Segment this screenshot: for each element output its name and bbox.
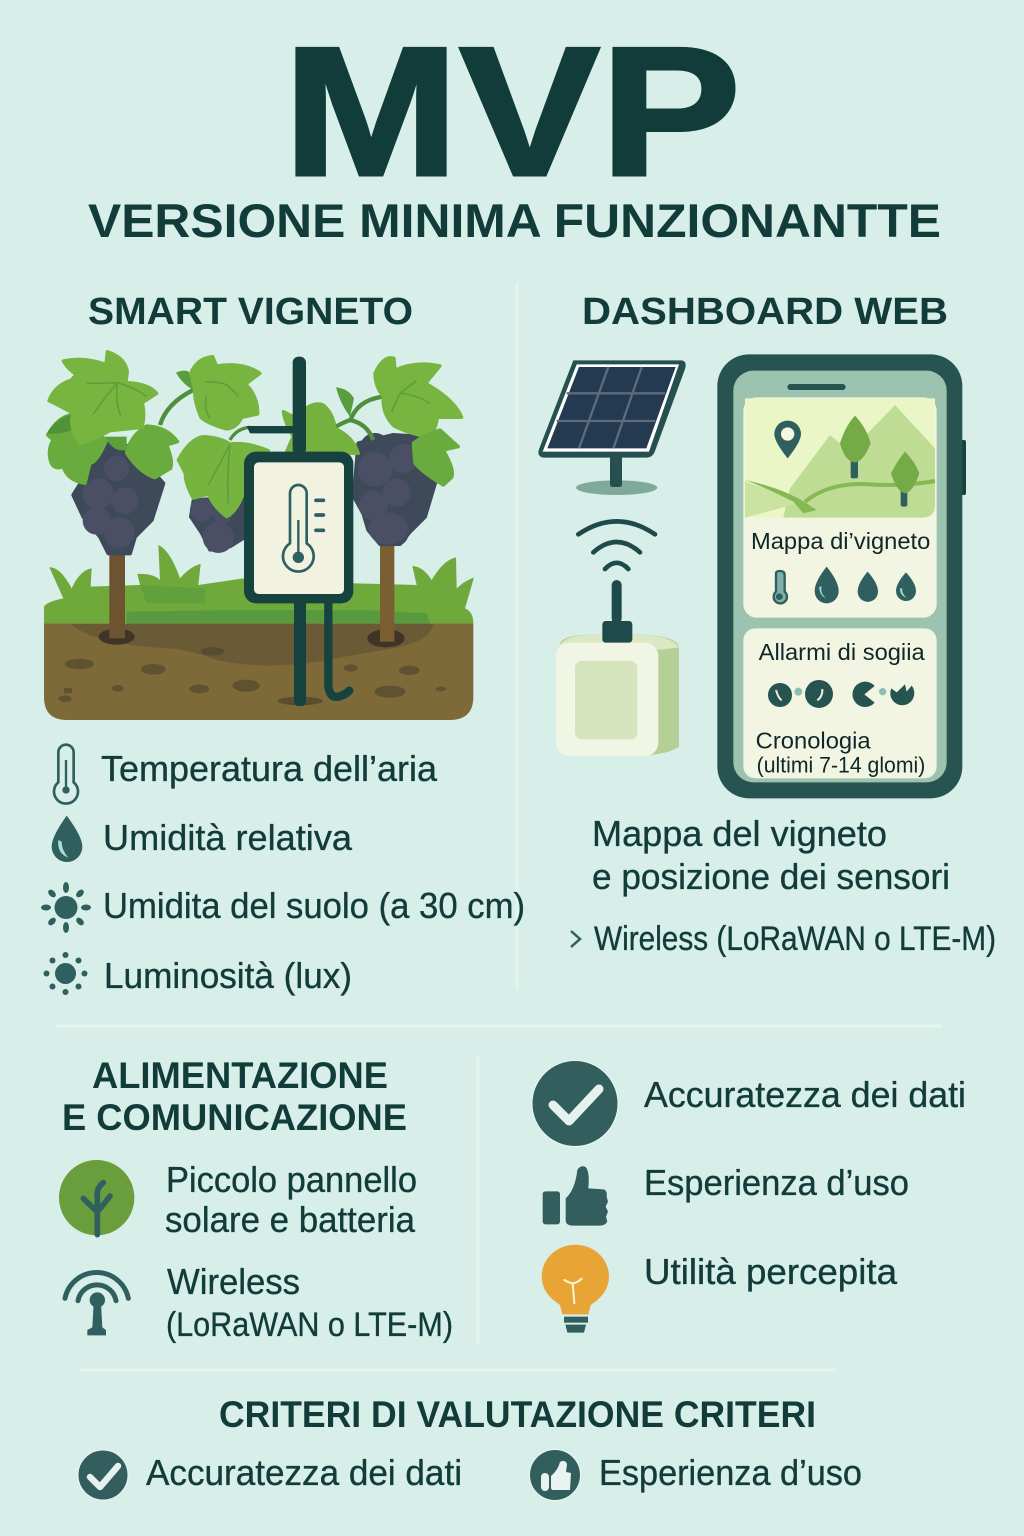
- solar panel: [538, 360, 686, 495]
- text: mappa del vigneto: e posizione dei sensori: [592, 856, 950, 897]
- small drops: [815, 567, 839, 603]
- sensor poles: [293, 357, 306, 455]
- card: mappa: Mappa di’vigneto: [751, 528, 930, 554]
- text: accuratezza: Accuratezza dei dati: [644, 1074, 966, 1115]
- text: pannello solare: solare e batteria: [165, 1199, 416, 1240]
- heading: dashboard web: DASHBOARD WEB: [582, 291, 948, 333]
- top right leaf: [375, 358, 462, 437]
- card: mappa: [743, 397, 937, 618]
- label: umidità suolo: Umidita del suolo (a 30 cm): [103, 885, 525, 926]
- list: sensors: [41, 745, 525, 996]
- grapes right: [354, 435, 435, 544]
- text: esperienza footer: Esperienza d’uso: [599, 1452, 862, 1493]
- icon: antenna: [65, 1273, 128, 1335]
- phone dashboard: [717, 354, 966, 798]
- heading: alimentazione e comunicazione: ALIMENTAZIONE: [92, 1055, 388, 1096]
- label: umidità relativa: Umidità relativa: [103, 817, 353, 858]
- card: allarmi e cronologia: Allarmi di sogiia: [759, 639, 925, 665]
- thermometer on sensor: [283, 485, 323, 572]
- text: pannello solare: Piccolo pannello: [166, 1159, 417, 1200]
- text: pannello solare: [165, 1159, 417, 1240]
- wifi waves: [578, 521, 655, 569]
- lower center leaf: [178, 437, 268, 517]
- text: utilità: Utilità percepita: [644, 1251, 898, 1292]
- sensor box: [244, 452, 353, 603]
- title: MVP: [283, 8, 741, 214]
- icon: light bulb: [542, 1245, 609, 1333]
- trees: [851, 460, 858, 478]
- label: temperatura: Temperatura dell’aria: [101, 748, 438, 789]
- icon: thumbs up: [543, 1166, 608, 1226]
- text: mappa del vigneto: Mappa del vigneto: [592, 813, 887, 854]
- grapes center: [191, 497, 243, 550]
- soil: [44, 623, 473, 720]
- icon: check: [532, 1060, 618, 1146]
- icon: thermometer: [54, 745, 78, 804]
- card: allarmi e cronologia: [743, 628, 937, 778]
- small thermometer: [774, 571, 787, 603]
- heading: criteri di valutazione: CRITERI DI VALUTAZIONE CRITERI: [219, 1394, 816, 1435]
- text: wireless lorawan: (LoRaWAN o LTE-M): [166, 1306, 453, 1344]
- text: wireless lorawan: Wireless: [167, 1261, 300, 1302]
- heading: smart vigneto: SMART VIGNETO: [88, 291, 413, 333]
- icon: small thumbs up: [530, 1450, 580, 1500]
- text: mappa del vigneto: [592, 813, 950, 897]
- illustration: solar panel, wireless node: [538, 360, 686, 756]
- icon: drop: [52, 816, 82, 862]
- card: allarmi e cronologia: Cronologia: [756, 727, 871, 753]
- vine stems: [160, 390, 193, 425]
- icon: sprout circle: [59, 1160, 134, 1235]
- grass: [44, 545, 474, 623]
- text: esperienza: Esperienza d’uso: [644, 1162, 909, 1203]
- grapes left: [73, 440, 163, 553]
- heading: alimentazione e comunicazione: [62, 1055, 407, 1138]
- icon: small check: [78, 1450, 128, 1500]
- back leaf center: [283, 404, 358, 453]
- card: allarmi e cronologia: (ultimi 7-14 glomi): [757, 752, 925, 777]
- top left leaf: [49, 352, 157, 443]
- map pin: [774, 421, 801, 458]
- lower left leaves: [48, 415, 107, 483]
- label: luminosità: Luminosità (lux): [104, 955, 352, 996]
- icon: sun: [41, 882, 91, 933]
- top center leaf: [191, 357, 260, 429]
- heading: alimentazione e comunicazione: E COMUNICAZIONE: [62, 1097, 407, 1138]
- text: accuratezza footer: Accuratezza dei dati: [146, 1452, 462, 1493]
- sensor node: [556, 580, 679, 756]
- trunks: [99, 629, 135, 645]
- illustration: vineyard with sensor: [44, 352, 474, 720]
- text: wireless lorawan: [166, 1261, 453, 1344]
- subtitle: VERSIONE MINIMA FUNZIONANTTE: [88, 194, 941, 247]
- icon: sun small: [44, 952, 88, 995]
